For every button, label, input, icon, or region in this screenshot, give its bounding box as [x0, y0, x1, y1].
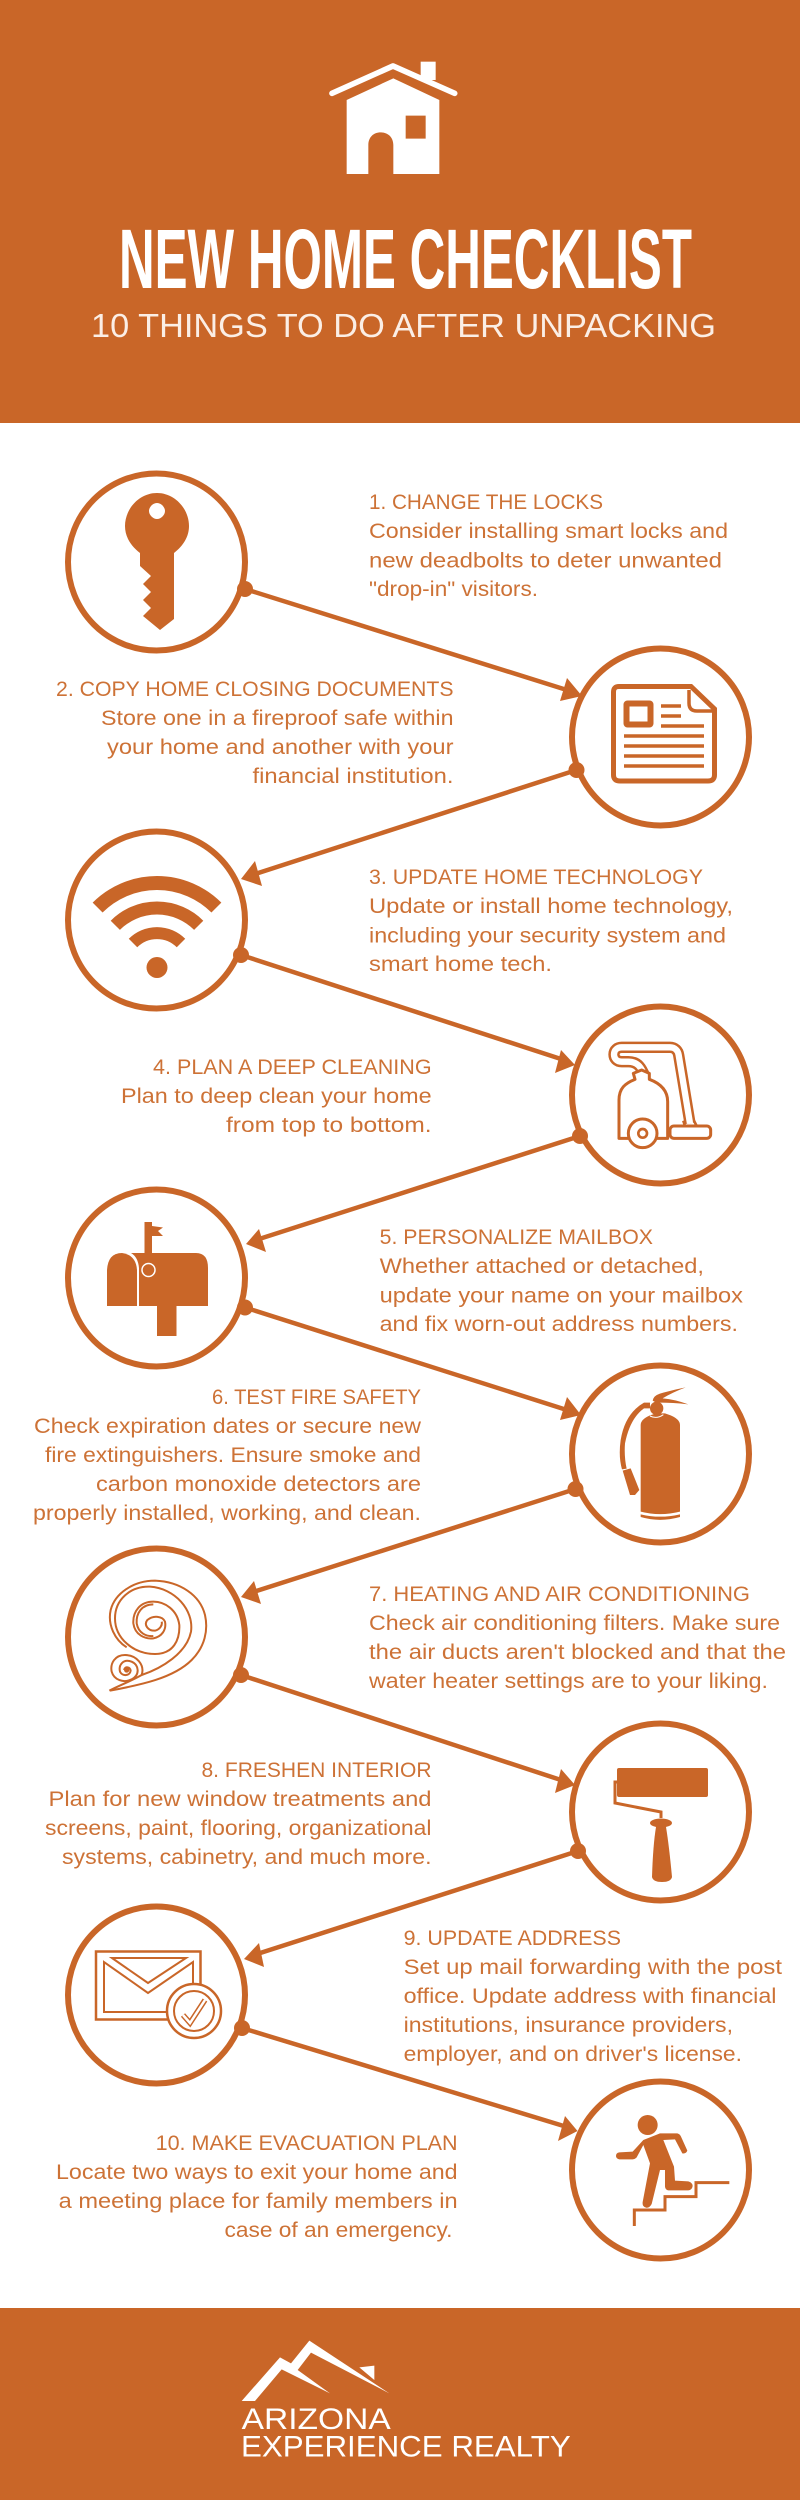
text 1: Consider installing smart locks and	[369, 519, 728, 543]
arrow 2 to 3	[241, 762, 584, 886]
step 7: heating and air conditioning	[68, 1548, 786, 1793]
text 9: institutions, insurance providers,	[404, 2013, 733, 2037]
panel: footer	[0, 2308, 800, 2500]
text 5: and fix worn-out address numbers.	[380, 1312, 738, 1336]
icon: paint roller	[615, 1768, 708, 1882]
text 8: screens, paint, flooring, organizational	[45, 1816, 431, 1840]
circle 6	[572, 1366, 749, 1542]
text 6: fire extinguishers. Ensure smoke and	[45, 1443, 421, 1467]
text 6: properly installed, working, and clean.	[33, 1501, 421, 1525]
brand name: ARIZONA	[242, 2403, 391, 2436]
icon: envelope with check badge	[96, 1952, 221, 2038]
text 9: office. Update address with financial	[404, 1984, 776, 2008]
text 9: Set up mail forwarding with the post	[404, 1955, 782, 1979]
text 6: Check expiration dates or secure new	[34, 1414, 422, 1438]
text 4: from top to bottom.	[226, 1113, 432, 1137]
text 2: 2. COPY HOME CLOSING DOCUMENTS	[56, 677, 454, 701]
text 7: Check air conditioning filters. Make sure	[369, 1611, 780, 1635]
icon: key	[125, 493, 189, 630]
text 5: 5. PERSONALIZE MAILBOX	[380, 1225, 653, 1249]
step 1: change the locks	[68, 474, 728, 701]
step 6: test fire safety	[33, 1366, 749, 1604]
brand name	[241, 2403, 571, 2464]
step 3: update home technology	[68, 832, 733, 1073]
icon: rolled spiral	[109, 1581, 206, 1691]
text 3	[369, 865, 733, 976]
icon: person on stairs	[616, 2115, 729, 2226]
icon: mountain roof logo	[242, 2341, 389, 2401]
text 10	[56, 2131, 458, 2242]
text 6: 6. TEST FIRE SAFETY	[212, 1385, 421, 1409]
text 3: 3. UPDATE HOME TECHNOLOGY	[369, 865, 703, 889]
text 10: case of an emergency.	[224, 2218, 452, 2242]
text 8	[45, 1758, 432, 1869]
text 2: your home and another with your	[107, 735, 453, 759]
arrow 7 to 8	[233, 1667, 575, 1793]
text 8: systems, cabinetry, and much more.	[62, 1845, 432, 1869]
icon: wifi	[98, 883, 216, 978]
brand name: EXPERIENCE REALTY	[241, 2431, 571, 2464]
text 4: Plan to deep clean your home	[121, 1084, 432, 1108]
text 10: a meeting place for family members in	[59, 2189, 458, 2213]
arrow 9 to 10	[234, 2020, 578, 2141]
circle 3	[68, 832, 245, 1008]
text 7: the air ducts aren't blocked and that the	[369, 1640, 786, 1664]
step 5: personalize mailbox	[68, 1190, 743, 1420]
circle 5	[68, 1190, 245, 1366]
icon: house	[332, 62, 455, 174]
arrow 8 to 9	[244, 1843, 586, 1967]
step 2: copy home closing documents	[56, 648, 749, 886]
icon: vacuum	[614, 1047, 711, 1148]
circle 4	[572, 1006, 749, 1184]
panel: header	[0, 0, 800, 423]
text 4	[121, 1055, 432, 1137]
text 8: 8. FRESHEN INTERIOR	[202, 1758, 432, 1782]
arrow 3 to 4	[233, 947, 575, 1073]
text 7: water heater settings are to your liking.	[368, 1669, 768, 1693]
circle 7	[68, 1548, 245, 1726]
text 5: Whether attached or detached,	[380, 1254, 704, 1278]
text 6: carbon monoxide detectors are	[96, 1472, 421, 1496]
text 5	[380, 1225, 743, 1336]
text 5: update your name on your mailbox	[380, 1284, 743, 1308]
step 4: plan a deep cleaning	[121, 1006, 749, 1252]
circle 10	[572, 2082, 749, 2258]
text 9: 9. UPDATE ADDRESS	[404, 1926, 621, 1950]
text 6	[33, 1385, 422, 1525]
text 8: Plan for new window treatments and	[48, 1787, 432, 1811]
icon: mailbox	[107, 1222, 208, 1336]
step 8: freshen interior	[45, 1724, 749, 1967]
arrow 4 to 5	[246, 1128, 588, 1252]
arrow 1 to 2	[237, 581, 582, 701]
text 2	[56, 677, 454, 788]
text 10: 10. MAKE EVACUATION PLAN	[156, 2131, 458, 2155]
step 9: update address	[68, 1906, 782, 2141]
circle 1	[68, 474, 245, 650]
text 1	[369, 490, 728, 601]
circle 9	[68, 1906, 245, 2084]
text 3: including your security system and	[369, 924, 726, 948]
text 9: employer, and on driver's license.	[404, 2042, 742, 2066]
subtitle: 10 THINGS TO DO AFTER UNPACKING	[91, 307, 716, 344]
text 10: Locate two ways to exit your home and	[56, 2160, 458, 2184]
icon: document	[614, 686, 716, 781]
text 2: financial institution.	[252, 764, 454, 788]
circle 8	[572, 1724, 749, 1900]
text 2: Store one in a fireproof safe within	[101, 706, 453, 730]
text 4: 4. PLAN A DEEP CLEANING	[153, 1055, 432, 1079]
text 7: 7. HEATING AND AIR CONDITIONING	[369, 1582, 750, 1606]
text 1: 1. CHANGE THE LOCKS	[369, 490, 603, 514]
text 3: smart home tech.	[369, 952, 552, 976]
arrow 6 to 7	[241, 1481, 584, 1604]
text 9	[404, 1926, 782, 2066]
text 7	[368, 1582, 786, 1693]
icon: fire extinguisher	[620, 1387, 688, 1520]
step 10: make evacuation plan	[56, 2082, 749, 2258]
text 1: "drop-in" visitors.	[369, 577, 538, 601]
text 3: Update or install home technology,	[369, 894, 733, 918]
circle 2	[572, 648, 749, 826]
arrow 5 to 6	[237, 1300, 581, 1420]
text 1: new deadbolts to deter unwanted	[369, 548, 722, 572]
